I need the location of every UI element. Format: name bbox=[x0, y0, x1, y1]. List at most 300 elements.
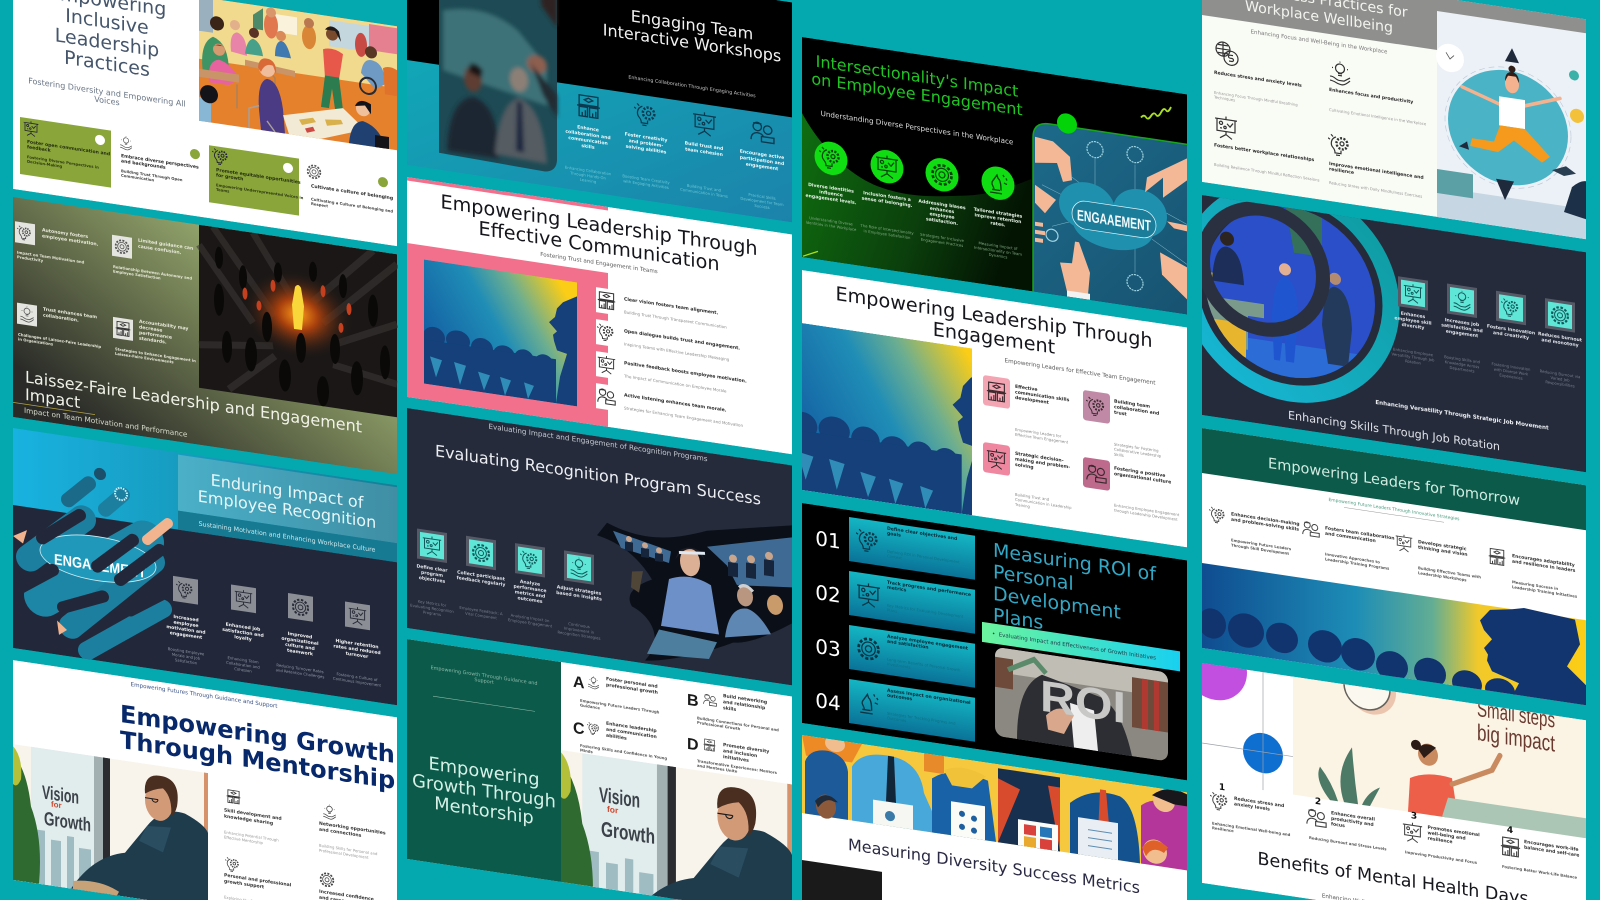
item: analyze performance: Employee Engagement bbox=[508, 617, 553, 629]
item: burnout: Reducing Burnout via bbox=[1540, 368, 1580, 379]
item: strategies: rates. bbox=[990, 220, 1006, 229]
item: communication skills: communication skills bbox=[1015, 389, 1070, 403]
item 1: anxiety levels bbox=[1234, 801, 1270, 813]
mentor photo: Growth bbox=[44, 809, 91, 837]
subtitle: Enhancing Versatility Through Strategic Job Movement bbox=[1375, 400, 1549, 432]
banner: • Evaluating Impact and Effectiveness of Growth Initiatives bbox=[992, 631, 1156, 662]
item: burnout: Reduces burnout bbox=[1538, 331, 1583, 344]
item: participation bbox=[740, 120, 784, 212]
wellbeing illustration bbox=[1436, 11, 1586, 239]
item: confidence bbox=[319, 872, 374, 900]
card: foster open communication: Fostering Diverse Perspectives in bbox=[27, 154, 99, 170]
title: Engagement bbox=[933, 318, 1056, 359]
item 4 bbox=[1501, 825, 1579, 880]
item: skill diversity: Enhancing Employee bbox=[1393, 346, 1434, 357]
item: organizational culture: through Leadership Development bbox=[1114, 508, 1178, 522]
title: Measuring Diversity Success Metrics bbox=[848, 835, 1140, 897]
purple circle bbox=[1183, 631, 1247, 705]
item 3: resilience bbox=[1428, 836, 1453, 845]
item: inclusion: Inclusion fosters a bbox=[863, 190, 911, 203]
item: collaboration: Enhancing Collaboration bbox=[565, 165, 612, 177]
item: collaboration: Enhance bbox=[577, 124, 599, 134]
item: accountability: Accountability may bbox=[139, 319, 188, 332]
item 2: focus bbox=[1331, 821, 1345, 829]
item: define objectives: Define clear bbox=[416, 563, 448, 574]
card: promote equitable opportunities bbox=[209, 145, 304, 216]
item C: and communication bbox=[606, 727, 657, 740]
item: adjust strategies: Improvement in bbox=[564, 625, 595, 635]
card: embrace diverse perspectives: and backgrounds bbox=[121, 158, 166, 171]
subtitle: Fostering Diversity and Empowering All bbox=[28, 76, 186, 109]
circular photo with rings bbox=[1189, 176, 1391, 408]
photo cutout: executive with team bbox=[597, 496, 792, 682]
green wave bbox=[802, 113, 1031, 291]
item: strategic thinking bbox=[1396, 534, 1481, 585]
item: skill diversity: employee skill bbox=[1394, 315, 1432, 327]
item B bbox=[687, 688, 779, 737]
dark crowd photo bbox=[199, 225, 397, 417]
item B: B bbox=[687, 691, 699, 710]
slide: Empowering Growth Through Mentorship (navy title) bbox=[13, 660, 397, 900]
item: culture: Improved bbox=[288, 631, 312, 641]
subtitle: Enhancing Focus and Well-Being in the Workplace bbox=[1251, 29, 1388, 56]
item: positive feedback: The Impact of Communication on Employee Morale bbox=[623, 373, 727, 394]
item: inclusion: in Employee Satisfaction bbox=[864, 228, 911, 240]
step 04 bbox=[815, 674, 975, 742]
item: retention: rates and reduced bbox=[333, 643, 381, 656]
item A: Empowering Future Leaders Through bbox=[580, 698, 660, 715]
item: identities bbox=[806, 138, 857, 232]
item 4: balance and self-care bbox=[1524, 845, 1579, 859]
subtitle: Sustaining Motivation and Enhancing Workplace Culture bbox=[199, 521, 376, 554]
item: decision making: making and problem- bbox=[1015, 456, 1070, 471]
item: retention bbox=[333, 600, 382, 688]
item: autonomy: Productivity bbox=[17, 254, 44, 263]
item: decision-making: Through Skill Development bbox=[1231, 542, 1289, 556]
item: better relationships: Fosters better workplace relationships bbox=[1214, 142, 1315, 163]
item: skill diversity: diversity bbox=[1402, 322, 1424, 331]
subtitle: Fostering Trust and Engagement in Teams bbox=[540, 252, 658, 275]
card: foster open communication: Decision-Making bbox=[27, 159, 63, 169]
title: Engaging Team bbox=[631, 6, 753, 44]
step 03: 03 bbox=[815, 634, 841, 662]
item: motivation: Morale and Job bbox=[172, 652, 201, 661]
item: creativity: with Engaging Activities bbox=[623, 178, 669, 190]
item: strategic thinking: Building Effective Teams with bbox=[1418, 565, 1481, 580]
item D: and inclusion bbox=[723, 748, 757, 759]
step 03 bbox=[815, 620, 975, 688]
item: culture: Reducing Turnover Rates bbox=[276, 662, 324, 674]
item: trust: Building Trust and bbox=[687, 183, 722, 193]
item: innovation: and creativity bbox=[1493, 330, 1529, 341]
item: networking: Professional Development bbox=[319, 848, 369, 860]
item: trust: team cohesion bbox=[685, 146, 723, 158]
card: promote equitable opportunities: Empowering Underrepresented Voices in bbox=[216, 182, 304, 200]
item: team collaboration: and communication bbox=[1325, 531, 1376, 544]
leader silhouette image bbox=[423, 259, 577, 406]
item: adjust strategies: Recognition Strategies bbox=[558, 629, 600, 641]
item: team collaboration: Innovative Approaches to bbox=[1325, 551, 1380, 565]
item: emotional intelligence: Improves emotional intelligence and bbox=[1329, 161, 1424, 181]
item: retention: Fostering a Culture of bbox=[337, 671, 378, 682]
step 03: Analyze employee engagement bbox=[887, 634, 969, 652]
item D: Promote diversity bbox=[723, 742, 769, 755]
item: team collaboration: collaboration and bbox=[1114, 404, 1159, 417]
item: emotional intelligence: resilience bbox=[1329, 166, 1354, 176]
item: team collaboration bbox=[1083, 390, 1162, 464]
card: foster open communication: feedback bbox=[27, 144, 52, 154]
item: collaboration: Through Hands-On bbox=[569, 170, 606, 181]
item: creativity: Boosting Team Creativity bbox=[622, 173, 670, 185]
mentor photo: Vision bbox=[599, 784, 640, 813]
card: foster open communication bbox=[20, 117, 111, 188]
step 02: Plans bbox=[887, 607, 897, 614]
item: communication skills: Effective bbox=[1015, 384, 1038, 393]
item: team collaboration bbox=[1303, 521, 1395, 572]
item: accountability: Strategies to Enhance Engagement in bbox=[115, 346, 196, 363]
step 01 bbox=[815, 512, 975, 580]
item: team collaboration: Fosters team collaboration bbox=[1325, 525, 1395, 542]
item: adaptability: Leadership Training Initiatives bbox=[1512, 584, 1578, 599]
item: better relationships: Building Resilience Through Mindful Reflection Sessions bbox=[1214, 162, 1319, 182]
item: job satisfaction: satisfaction and bbox=[1441, 322, 1483, 334]
step 03: and satisfaction bbox=[887, 639, 929, 651]
item: communication skills: Empowering Leaders for bbox=[1015, 427, 1062, 439]
item: motivation: motivation and bbox=[166, 624, 206, 636]
item: strategies: improve retention bbox=[975, 212, 1021, 225]
item 2: 2 bbox=[1315, 797, 1321, 808]
item 4: Fostering Better Work-Life Balance bbox=[1502, 864, 1578, 880]
title: Empowering Growth bbox=[120, 700, 395, 769]
item: job satisfaction bbox=[1441, 283, 1483, 375]
item C bbox=[573, 716, 667, 765]
item: collaboration: Learning bbox=[580, 177, 597, 184]
slide: Engaging Team Interactive Workshops bbox=[407, 0, 792, 222]
subtitle: Voices bbox=[94, 95, 120, 107]
item: skill diversity: Versatility Through Job bbox=[1392, 351, 1435, 363]
item 3 bbox=[1403, 810, 1480, 865]
item: reduces stress bbox=[1213, 41, 1302, 112]
item: motivation: Boosting Employee bbox=[168, 646, 205, 657]
item D bbox=[687, 735, 778, 780]
subtitle: Evaluating Impact and Engagement of Recognition Programs bbox=[488, 422, 708, 463]
slide: Measuring ROI of Personal Development Plans bbox=[802, 503, 1187, 780]
item D: and Mentees Unite bbox=[697, 763, 738, 774]
crosshair lines bbox=[1202, 663, 1293, 795]
item 4: 4 bbox=[1507, 825, 1513, 836]
card: promote equitable opportunities: Teams bbox=[216, 187, 230, 194]
item B: Build networking bbox=[723, 693, 767, 706]
ROI photo bbox=[995, 647, 1168, 762]
step 04: 04 bbox=[815, 688, 841, 716]
item: collect feedback: Vital Component bbox=[465, 611, 497, 620]
item: biases: satisfaction. bbox=[926, 216, 958, 227]
item: decision making: Building Trust and bbox=[1015, 492, 1050, 502]
slide: Empowering Growth Through Mentorship (green panel) bbox=[407, 639, 792, 900]
item A: professional growth bbox=[606, 682, 658, 696]
title: Inclusive bbox=[65, 4, 149, 39]
mentor photo: Growth bbox=[601, 818, 655, 849]
item 3: well-being and bbox=[1428, 830, 1466, 842]
item: job satisfaction: Knowledge Across bbox=[1445, 359, 1479, 369]
item: positive feedback bbox=[596, 351, 747, 399]
item C: abilities bbox=[606, 733, 627, 742]
item: job satisfaction: Departments bbox=[1450, 365, 1474, 374]
item B: Building Connections for Personal and bbox=[697, 715, 779, 732]
card: embrace diverse perspectives bbox=[120, 136, 200, 182]
item: skill development bbox=[224, 789, 282, 848]
slide: Empowering Leadership Through Engagement bbox=[789, 268, 1187, 547]
item: motivation: employee bbox=[173, 620, 199, 629]
item: motivation: Satisfaction bbox=[175, 657, 198, 666]
item 2: Enhances overall bbox=[1331, 810, 1375, 823]
slide: Empowering Leaders for Tomorrow bbox=[1198, 427, 1586, 715]
item: define objectives: Programs bbox=[423, 609, 441, 617]
item: identities: influence bbox=[819, 189, 843, 199]
item: motivation: engagement bbox=[170, 630, 203, 641]
title: Measuring ROI of bbox=[993, 539, 1157, 586]
item: satisfaction bbox=[222, 583, 264, 675]
item: burnout bbox=[1538, 297, 1583, 390]
card: cultivate a culture of belonging: Respect bbox=[311, 201, 328, 208]
item: collaboration bbox=[565, 93, 612, 187]
small steps illustration: big impact bbox=[1477, 719, 1555, 757]
item: limited guidance: Relationship Between Autonomy and bbox=[113, 264, 192, 281]
item: trust: Communication in Teams bbox=[680, 187, 728, 199]
item: autonomy: Impact on Team Motivation and bbox=[17, 250, 85, 265]
item: participation: engagement bbox=[746, 161, 779, 172]
mentor photo bbox=[561, 750, 792, 900]
engagement tablet graphic: ENGAAEMENT bbox=[1077, 207, 1152, 235]
item: reduces stress: Techniques bbox=[1213, 94, 1235, 103]
item: adjust strategies: Continuous bbox=[568, 621, 590, 629]
step 04: outcomes bbox=[887, 693, 912, 702]
subtitle: Empowering Future Leaders Through Innovative Strategies bbox=[1328, 497, 1460, 522]
item D: initiatives bbox=[723, 754, 749, 764]
step 01: Define clear objectives and bbox=[887, 526, 957, 542]
step 04: Outcomes bbox=[887, 715, 906, 723]
item: define objectives: program bbox=[421, 570, 443, 579]
dark panel bbox=[802, 860, 882, 900]
step 01: Context bbox=[887, 553, 902, 561]
item: clear vision: Building Trust Through Transparent Communication bbox=[624, 309, 727, 330]
item 2: productivity and bbox=[1331, 816, 1374, 828]
card: cultivate a culture of belonging bbox=[308, 165, 393, 218]
item: participation: Success bbox=[754, 203, 770, 210]
item: networking: and connections bbox=[319, 827, 362, 839]
leader silhouette image bbox=[789, 321, 989, 518]
card: cultivate a culture of belonging: Cultivate a culture of belonging bbox=[311, 183, 393, 202]
item: biases: Addressing biases bbox=[918, 198, 966, 211]
item 3: Improving Productivity and Focus bbox=[1405, 849, 1478, 865]
title: Intersectionality's Impact bbox=[816, 52, 1018, 101]
small steps illustration: Small steps bbox=[1477, 696, 1555, 733]
item: skill development: knowledge sharing bbox=[224, 813, 273, 827]
title: on Employee Engagement bbox=[811, 69, 1023, 119]
item: adaptability bbox=[1489, 548, 1578, 599]
item: culture: culture and bbox=[285, 642, 315, 652]
item: skill diversity: Rotation bbox=[1405, 358, 1422, 366]
item: reduces stress: Enhancing Focus Through Mindful Breathing bbox=[1214, 90, 1298, 107]
item: culture: and Retention Challenges bbox=[276, 667, 324, 679]
item: motivation bbox=[166, 575, 206, 667]
item: biases: Engagement Practices bbox=[921, 237, 963, 248]
item: enhances focus: Enhances focus and productivity bbox=[1329, 87, 1413, 105]
item: communication skills: Effective Team Engagement bbox=[1015, 432, 1069, 445]
item: innovation: with Diverse Work bbox=[1494, 366, 1529, 377]
item: analyze performance: performance bbox=[513, 583, 547, 594]
item: adjust strategies bbox=[556, 549, 602, 641]
item A: A bbox=[573, 673, 585, 692]
slide: Empowering Leadership Through Effective Communication bbox=[407, 177, 792, 454]
item 1 bbox=[1210, 781, 1291, 842]
item: biases bbox=[918, 155, 966, 248]
item: retention: turnover bbox=[346, 651, 369, 660]
item: accountability: Laissez-Faire Environments bbox=[115, 351, 174, 365]
team illustration bbox=[802, 731, 1187, 872]
step 03: Long-term Benefits of Personal Growth bbox=[887, 657, 961, 673]
item: retention: Continuous Improvement bbox=[333, 676, 382, 688]
title: Empowering Leadership Through bbox=[440, 190, 758, 260]
item: growth support: growth support bbox=[224, 878, 265, 891]
subtitle: Enhancing Collaboration Through Engaging Activities bbox=[628, 75, 756, 100]
item: emotional intelligence: Reducing Stress with Daily Mindfulness Exercises bbox=[1329, 180, 1422, 199]
item: satisfaction: Cohesion bbox=[234, 666, 252, 674]
blurred photo bbox=[439, 0, 557, 173]
green side panel bbox=[407, 639, 561, 882]
item: decision making bbox=[983, 442, 1072, 515]
item: participation: participation and bbox=[740, 155, 784, 167]
item: adaptability: Encourages adaptability bbox=[1512, 553, 1575, 569]
item: creativity: and problem- bbox=[629, 138, 663, 149]
item: organizational culture: Fostering a positive bbox=[1114, 466, 1165, 479]
classroom illustration bbox=[199, 0, 397, 150]
item: positive feedback: Positive feedback boosts employee motivation. bbox=[624, 360, 747, 385]
item: decision making: solving bbox=[1015, 462, 1034, 471]
leader silhouette banner bbox=[1198, 559, 1586, 715]
title: Personal bbox=[993, 560, 1074, 595]
card: promote equitable opportunities: for growth bbox=[216, 172, 243, 183]
item: decision-making: Empowering Future Leaders bbox=[1231, 537, 1292, 551]
subtitle: Understanding Diverse Perspectives in the Workplace bbox=[821, 109, 1014, 147]
item: inclusion: sense of belonging. bbox=[862, 196, 913, 209]
item: job satisfaction: engagement bbox=[1446, 329, 1479, 339]
green dot bbox=[1057, 112, 1077, 135]
item: culture: organizational bbox=[281, 636, 319, 647]
item: skill diversity: Enhances bbox=[1401, 311, 1426, 320]
step 03: Investments bbox=[887, 661, 910, 670]
item: identities: Diverse identities bbox=[808, 182, 854, 195]
item: inclusion bbox=[859, 146, 914, 241]
item 1: Enhancing Emotional Well-being and bbox=[1212, 821, 1291, 837]
item: networking: Networking opportunities bbox=[319, 821, 386, 837]
subtitle band bbox=[178, 511, 397, 562]
item: innovation: Fosters innovation bbox=[1487, 323, 1535, 337]
item: collaboration: skills bbox=[581, 143, 595, 151]
item: team collaboration: trust bbox=[1114, 410, 1127, 418]
item: burnout: Varied Job bbox=[1550, 375, 1570, 383]
item: team collaboration: Collaborative Leadership bbox=[1114, 447, 1162, 459]
blue circle bbox=[1243, 730, 1283, 776]
item: enhances focus bbox=[1329, 60, 1427, 126]
item: collect feedback: feedback regularly bbox=[457, 575, 505, 588]
item: emotional intelligence bbox=[1328, 134, 1424, 199]
item: active listening: Strategies for Enhancing Team Engagement and Motivation bbox=[624, 405, 743, 428]
item: satisfaction: Enhancing Team bbox=[227, 655, 259, 665]
item C: Fostering Skills and Confidence in Young bbox=[580, 743, 667, 761]
item: open dialogue: Open dialogue builds trust and engagement. bbox=[624, 328, 740, 352]
title: Mentorship bbox=[434, 793, 534, 829]
step 02: Key Metrics for Evaluating Development bbox=[887, 603, 964, 619]
item: clear vision: Clear vision fosters team alignment. bbox=[624, 296, 718, 316]
item: strategic thinking: Leadership Workshops bbox=[1418, 570, 1467, 583]
slide: Intersectionality's Impact on Employee Engagement bbox=[802, 37, 1202, 337]
item: limited guidance: cause confusion. bbox=[138, 244, 182, 256]
engagement graphic bbox=[13, 455, 168, 663]
title: Effective Communication bbox=[478, 217, 720, 276]
item 1: Reduces stress and bbox=[1234, 796, 1284, 809]
item: creativity: Foster creativity bbox=[625, 131, 667, 144]
card: embrace diverse perspectives: Communication bbox=[121, 173, 154, 183]
item: decision making: Communication in Leadership bbox=[1015, 497, 1072, 510]
slide: Mindfulness Practices for Workplace Wellbeing bbox=[1202, 0, 1586, 239]
title: Empowering Leaders for Tomorrow bbox=[1268, 455, 1520, 509]
item: define objectives: objectives bbox=[419, 575, 445, 585]
accent line bbox=[13, 402, 95, 415]
item: biases: Strategies for Inclusive bbox=[920, 232, 964, 243]
item: communication skills bbox=[983, 375, 1070, 445]
item: participation: Practical Skills bbox=[748, 192, 776, 201]
item: team collaboration: Building team bbox=[1114, 399, 1150, 410]
item: define objectives: Evaluating Recognition bbox=[410, 602, 454, 614]
item 1: 1 bbox=[1219, 783, 1225, 793]
divider bbox=[1344, 507, 1444, 523]
item: limited guidance bbox=[112, 234, 193, 280]
slide: Enhancing Skills Through Job Rotation bbox=[1189, 176, 1586, 472]
item: culture: teamwork bbox=[287, 648, 314, 658]
item: decision-making bbox=[1209, 507, 1299, 558]
item: skill development: Enhancing Potential Through bbox=[224, 829, 279, 843]
item: trust bbox=[17, 303, 101, 354]
item: active listening bbox=[596, 383, 743, 430]
item: strategies: Dynamics bbox=[989, 252, 1007, 260]
small squiggle bbox=[803, 249, 818, 258]
item: satisfaction: loyalty bbox=[234, 634, 252, 643]
item: satisfaction: Collaboration and bbox=[226, 660, 260, 670]
item: accountability bbox=[113, 316, 196, 364]
item: networking bbox=[319, 803, 386, 863]
item D: Transformative Experiences: Mentors bbox=[697, 758, 778, 775]
card: promote equitable opportunities: Promote equitable opportunities bbox=[216, 167, 301, 186]
title: Leadership bbox=[55, 23, 159, 62]
title: Laissez-Faire Leadership and Engagement bbox=[25, 367, 362, 436]
title: Enhancing Skills Through Job Rotation bbox=[1288, 409, 1500, 453]
item: collect feedback: Employee Feedback: A bbox=[459, 605, 503, 616]
item: organizational culture: Enhancing Employee Engagement bbox=[1114, 503, 1180, 517]
item 1: Resilience bbox=[1212, 825, 1234, 833]
subtitle: Empowering Futures Through Guidance and Support bbox=[131, 682, 278, 710]
item: adaptability: and resilience in leaders bbox=[1512, 559, 1576, 574]
card: foster open communication: Foster open communication and bbox=[27, 139, 110, 157]
step 01: Defining ROI in Personal Development bbox=[887, 549, 960, 565]
item B: skills bbox=[723, 705, 736, 713]
item: trust: Challenges of Laissez-Faire Leadership bbox=[18, 332, 101, 349]
item C: Minds bbox=[580, 747, 593, 754]
item: define objectives: Key Metrics for bbox=[418, 599, 447, 608]
subtitle: Empowering Growth Through Guidance and bbox=[431, 665, 537, 687]
item: autonomy bbox=[15, 221, 98, 264]
item: analyze performance: Analyze bbox=[520, 579, 540, 588]
